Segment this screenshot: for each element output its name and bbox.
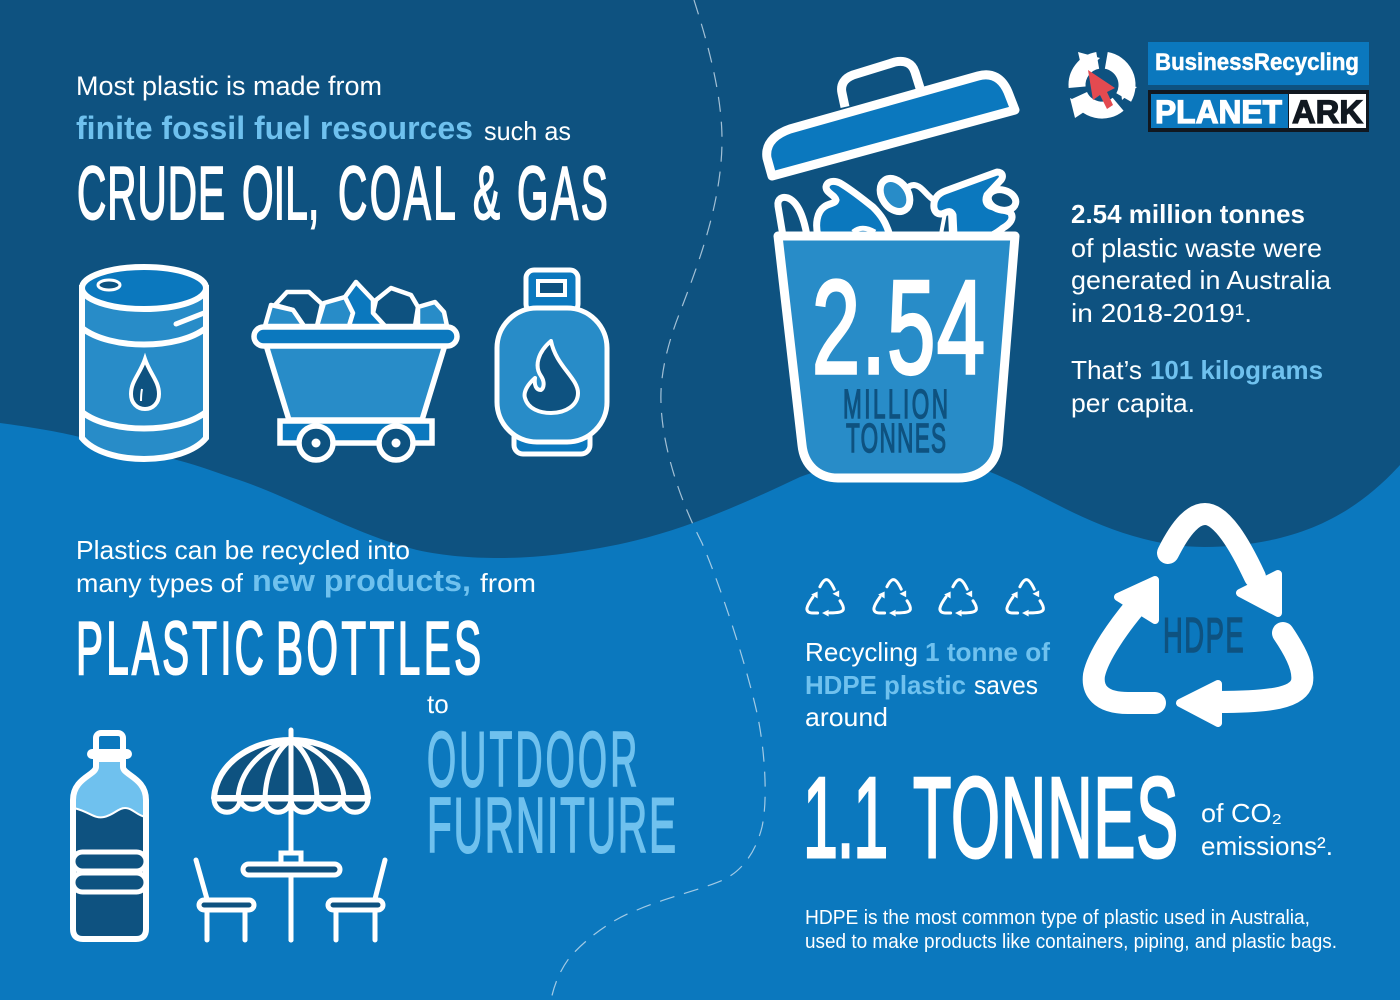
text: plastic waste statistics: That’s [1071,355,1142,385]
heading: new products: many types of [76,568,244,598]
text: HDPE footnote: HDPE is the most common type of plastic used in Australia, [805,907,1310,929]
text: plastic waste statistics: 2.54 million tonnes [1071,199,1305,229]
logo: BusinessRecycling Planet Ark: PLANET [1155,94,1282,130]
heading: new products: FURNITURE [427,783,676,870]
text: recycling one tonne of HDPE: 1 tonne of [925,637,1050,667]
heading: fossil fuels: & [473,151,500,235]
icon: large recycling triangle with HDPE label: HDPE [1163,609,1244,663]
heading: fossil fuels: GAS [517,151,608,235]
heading: fossil fuels: COAL [338,151,456,235]
icon: patio table, umbrella and chairs [196,730,385,940]
heading: new products: OUTDOOR [427,716,637,803]
text: HDPE footnote: used to make products like containers, piping, and plastic bags. [805,931,1337,953]
heading: new products: to [427,689,449,719]
stat: 1.1 tonnes of CO2 emissions: of CO₂ [1201,798,1282,828]
heading: fossil fuels [76,71,608,235]
icon: large recycling triangle with HDPE label [1094,514,1302,723]
text: HDPE footnote [805,907,1337,953]
logo: BusinessRecycling Planet Ark: BusinessRecycling [1155,49,1359,76]
text: plastic waste statistics [1071,199,1332,418]
text: plastic waste statistics: 101 kilograms [1150,355,1323,385]
icon: bin with 2.54 million tonnes: TONNES [846,416,946,462]
logo: BusinessRecycling Planet Ark [1070,42,1369,132]
icon: plastic bottle [73,733,146,939]
text: recycling one tonne of HDPE: HDPE plastic [805,670,966,700]
icon: coal cart [254,282,457,460]
heading: new products: new products, [252,563,471,598]
dashed divider line [551,0,765,1000]
text: recycling one tonne of HDPE: Recycling [805,637,918,667]
icon: bin lid [767,61,1015,176]
heading: new products [76,535,676,870]
icon row: four small recycling symbols [807,580,1043,617]
heading: new products: from [480,568,536,598]
text: recycling one tonne of HDPE [805,637,1050,732]
text: plastic waste statistics: per capita. [1071,388,1195,418]
text: plastic waste statistics: of plastic waste were [1071,233,1322,263]
text: recycling one tonne of HDPE: around [805,702,888,732]
heading: new products: Plastics can be recycled into [76,535,410,565]
heading: fossil fuels: such as [484,116,571,146]
stat: 1.1 tonnes of CO2 emissions: TONNES [913,755,1178,882]
stat: 1.1 tonnes of CO2 emissions: 1.1 [803,755,888,882]
logo: BusinessRecycling Planet Ark: ARK [1292,94,1363,130]
heading: fossil fuels: Most plastic is made from [76,71,382,101]
icon: oil barrel [82,267,206,459]
stat: 1.1 tonnes of CO2 emissions: emissions². [1201,831,1333,861]
stat: 1.1 tonnes of CO2 emissions [803,755,1333,882]
icon: bin with 2.54 million tonnes: MILLION [843,382,948,428]
heading: fossil fuels: CRUDE [77,151,225,235]
heading: fossil fuels: OIL, [242,151,319,235]
icon: bin with 2.54 million tonnes [778,236,1015,478]
icon: plastic waste in bin [778,172,1018,236]
text: plastic waste statistics: in 2018-2019¹. [1071,298,1252,328]
icon: gas bottle [497,270,607,454]
heading: fossil fuels: finite fossil fuel resources [76,110,473,146]
icon: bin with 2.54 million tonnes: 2.54 [812,252,985,401]
heading: new products: BOTTLES [276,606,481,690]
heading: new products: PLASTIC [76,606,264,690]
background: upper dark wave [0,0,1400,558]
text: plastic waste statistics: generated in Australia [1071,265,1332,295]
text: recycling one tonne of HDPE: saves [974,670,1038,700]
